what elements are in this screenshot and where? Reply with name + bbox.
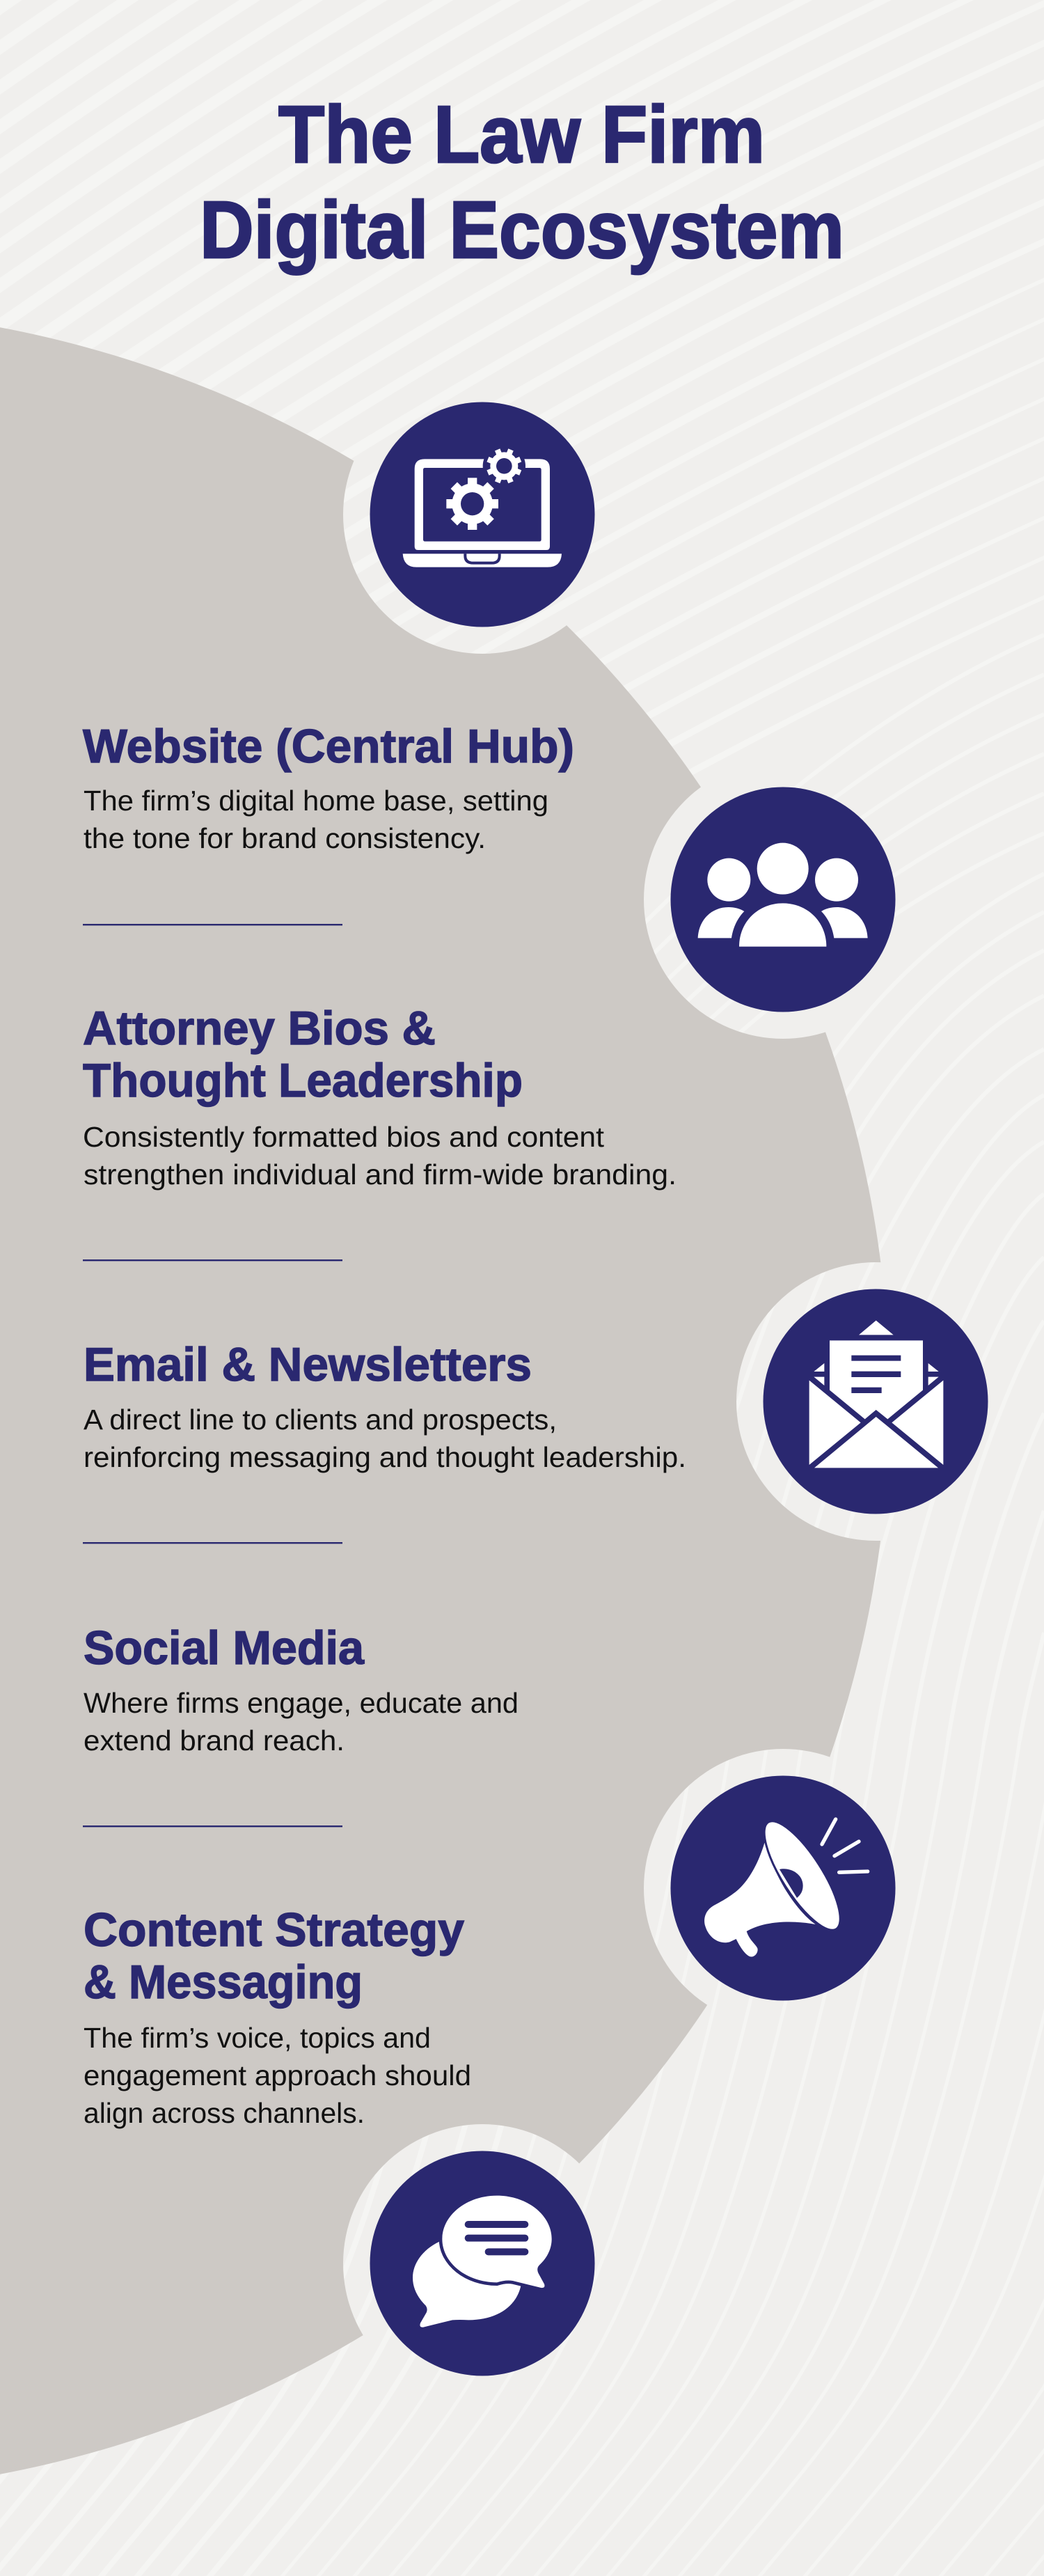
body: email: reinforcing messaging and thought leadership. (84, 1441, 686, 1473)
body: attorney bios (83, 1121, 677, 1191)
section: content strategy (84, 1903, 471, 2129)
body: website (84, 785, 548, 854)
large grey semicircle panel with icon cut-outs (0, 308, 889, 2493)
body: social media: extend brand reach. (84, 1725, 345, 1757)
icon: open envelope with letter (763, 1289, 988, 1514)
body: website: The firm’s digital home base, setting (84, 785, 548, 817)
section: social media (84, 1621, 519, 1757)
body: website: the tone for brand consistency. (84, 822, 486, 854)
body: content strategy: engagement approach should (84, 2059, 471, 2091)
title: The Law Firm (278, 89, 765, 180)
icon: speech bubbles (370, 2151, 594, 2375)
body: email (84, 1404, 686, 1473)
icon: laptop with gears (370, 402, 594, 627)
icon: three people (671, 787, 895, 1012)
heading: website: Website (Central Hub) (83, 720, 574, 773)
heading: attorney bios: Attorney Bios & (83, 1002, 436, 1055)
icon: megaphone (671, 1775, 895, 2001)
heading: email: Email & Newsletters (84, 1338, 532, 1391)
body: attorney bios: strengthen individual and firm-wide branding. (84, 1159, 677, 1191)
body: email: A direct line to clients and prospects, (84, 1404, 557, 1436)
title: Digital Ecosystem (200, 184, 844, 275)
body: social media (84, 1687, 519, 1757)
body: social media: Where firms engage, educate and (84, 1687, 519, 1719)
heading: attorney bios: Thought Leadership (83, 1054, 523, 1107)
heading: attorney bios (83, 1002, 523, 1107)
section: attorney bios (83, 1002, 677, 1191)
body: content strategy: align across channels. (84, 2097, 365, 2129)
heading: social media: Social Media (84, 1621, 365, 1674)
section: email (84, 1338, 686, 1473)
title (200, 89, 844, 275)
body: content strategy: The firm’s voice, topics and (84, 2022, 431, 2054)
body: attorney bios: Consistently formatted bios and content (83, 1121, 605, 1153)
heading: content strategy: & Messaging (84, 1956, 363, 2009)
section: website (83, 720, 574, 854)
heading: content strategy: Content Strategy (84, 1903, 464, 1956)
heading: content strategy (84, 1903, 464, 2009)
body: content strategy (84, 2022, 471, 2129)
